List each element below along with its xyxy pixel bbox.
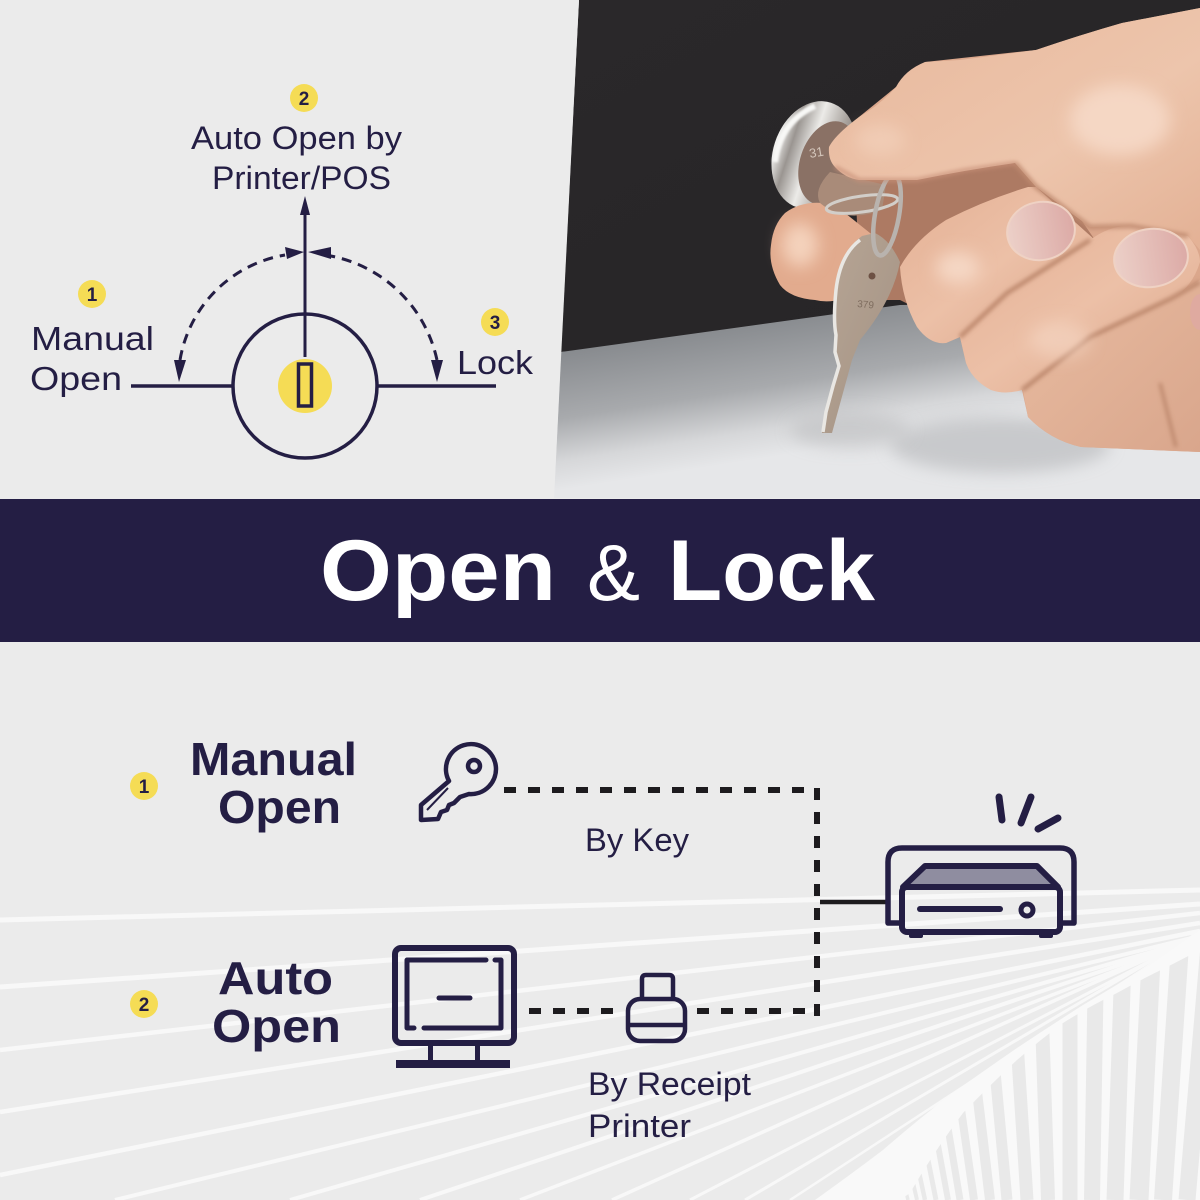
lock cylinder: 31 [808,144,825,161]
badge 2 [290,84,318,112]
dashed connectors [504,788,887,1016]
label: auto open by printer/POS: Auto Open by [191,120,402,156]
shadow under hand [890,417,1110,473]
badge 3: 3 [490,313,500,334]
title text: Open [320,523,556,619]
curled index finger [770,202,871,302]
label: manual open: Manual [31,320,154,357]
background pattern: radiating lines [0,890,1200,1200]
heading: manual open: Open [218,781,341,833]
heading: manual open: Manual [190,733,357,785]
row: auto open [130,948,751,1144]
pinky finger [1022,280,1200,452]
skin highlights [855,85,1170,358]
badge 3 [481,308,509,336]
drawer feet [909,932,1053,938]
hanging key: 379 [857,299,875,311]
title text [320,523,875,619]
desk surface [555,304,1026,486]
horizontal key ring [824,193,898,215]
photo: hand turning key in cash drawer lock [554,0,1200,498]
heading: auto open: Open [212,1000,341,1052]
signal rays [999,797,1058,829]
arrow: dashed arc left [174,247,304,382]
label: by receipt printer [588,1066,751,1144]
drawer slot [920,906,1000,912]
drawer front [561,0,1200,352]
badge 2 [130,990,158,1018]
icon: cash drawer [888,797,1074,938]
badge 1: 1 [139,777,150,798]
label: manual open [30,320,154,397]
label: by key: By Key [585,822,689,858]
ring finger [960,226,1200,392]
badge 2: 2 [299,89,309,110]
label: by receipt printer: By Receipt [588,1066,751,1102]
hand base silhouette [829,8,1200,452]
hand shading [835,163,1200,447]
palm shadow [856,163,1094,304]
drawer body [902,887,1060,932]
badge 1 [130,772,158,800]
fingernail: middle finger [1006,200,1076,262]
label: by receipt printer: Printer [588,1108,691,1144]
badge 1: 1 [87,285,98,306]
finger highlight [782,223,818,267]
title text: Lock [668,523,875,619]
icon: computer monitor [395,948,514,1068]
drawer button [1021,904,1033,916]
shadow under key [790,412,910,448]
row: manual open [130,733,689,858]
arrow: dashed arc right [308,247,443,382]
thumb and back of hand [829,8,1200,250]
icon: key [421,744,496,820]
vertical key ring [870,180,904,258]
upper key bow [818,172,886,216]
title text: & [587,528,640,617]
lock dial [131,314,496,458]
fingernail: pinky [1190,294,1200,330]
label: auto open by printer/POS [191,120,402,196]
badge 2: 2 [139,995,149,1016]
lock position diagram [30,84,534,458]
lock cylinder [770,101,852,207]
label: auto open by printer/POS: Printer/POS [212,160,391,196]
title banner [0,499,1200,642]
icon: receipt printer [628,975,685,1041]
arrow: up to auto open [300,196,310,357]
drawer lid [903,866,1058,887]
label: lock: Lock [457,344,534,381]
heading: manual open [190,733,357,833]
outer frame [888,848,1074,923]
fingernail: ring finger [1113,228,1189,288]
middle finger [900,187,1095,343]
label: manual open: Open [30,360,122,397]
heading: auto open: Auto [218,952,333,1004]
heading: auto open [212,952,341,1052]
badge 1 [78,280,106,308]
hanging key [822,233,900,433]
